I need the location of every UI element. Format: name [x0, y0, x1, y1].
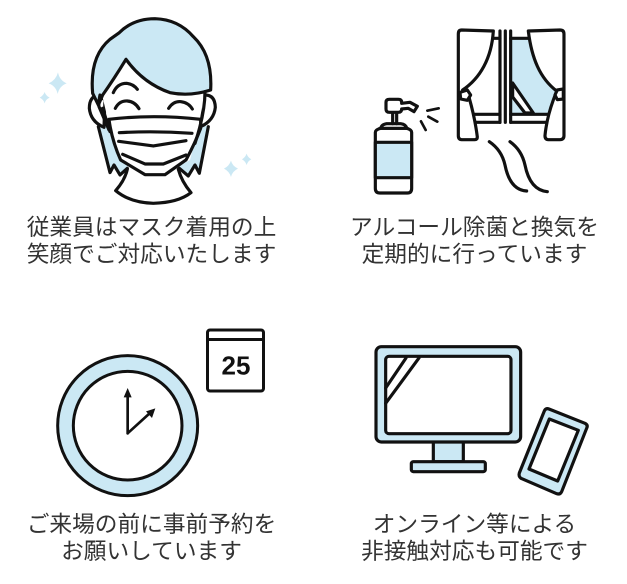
- spray lines: [421, 108, 439, 130]
- pump head: [386, 99, 417, 112]
- caption: disinfection and ventilation: [350, 214, 599, 267]
- airflow lines: [489, 142, 527, 191]
- glass reflection: [513, 83, 533, 113]
- calendar date: 25: [222, 350, 250, 380]
- ear straps: [99, 95, 110, 132]
- shoulder and neck: [381, 124, 407, 128]
- centre bars: [500, 31, 511, 122]
- mask pleats: [119, 132, 192, 133]
- icon: window with curtains: [458, 30, 564, 192]
- sill: [473, 114, 550, 122]
- icon: calendar: [207, 330, 264, 391]
- label: [375, 142, 412, 178]
- icon: clock: [58, 356, 198, 496]
- curtain ties: [460, 90, 471, 100]
- caption: mask staff: [27, 214, 276, 267]
- caption: online contactless: 非接触対応も可能です: [361, 538, 588, 564]
- caption: advance reservation: ご来場の前に事前予約を: [27, 511, 276, 537]
- right curtain: [528, 30, 564, 140]
- mask: [109, 117, 201, 175]
- left curtain: [458, 30, 493, 140]
- icon: smartphone: [519, 409, 587, 494]
- clock face: [73, 371, 182, 480]
- caption: online contactless: [361, 511, 588, 564]
- caption: mask staff: 従業員はマスク着用の上: [27, 214, 276, 240]
- caption: online contactless: オンライン等による: [373, 511, 576, 537]
- monitor stand: [433, 441, 463, 462]
- sparkles: [49, 72, 67, 94]
- face: [102, 50, 205, 174]
- window frame: [458, 30, 564, 140]
- icon: smiling person wearing mask: [40, 19, 251, 203]
- phone screen: [529, 419, 578, 481]
- eyebrow and eyes: [113, 83, 137, 93]
- hair: [92, 19, 211, 105]
- neck: [116, 169, 191, 203]
- caption: advance reservation: お願いしています: [61, 538, 242, 564]
- monitor bezel: [376, 347, 521, 442]
- hair back right: [178, 123, 208, 176]
- clock hands: [128, 393, 150, 433]
- clock ring: [58, 356, 198, 496]
- caption: mask staff: 笑顔でご対応いたします: [27, 241, 276, 267]
- ears: [89, 95, 105, 127]
- hair back left: [98, 123, 128, 175]
- icon: spray bottle: [375, 99, 439, 193]
- monitor base: [411, 462, 485, 472]
- bottle body: [375, 128, 412, 193]
- screen glare: [386, 358, 419, 403]
- caption: disinfection and ventilation: アルコール除菌と換気を: [350, 214, 599, 240]
- window view: [511, 38, 557, 114]
- phone body: [519, 409, 587, 494]
- caption: advance reservation: [27, 511, 276, 564]
- icon: desktop monitor: [376, 347, 521, 472]
- screen: [386, 356, 511, 434]
- caption: disinfection and ventilation: 定期的に行っています: [362, 241, 587, 267]
